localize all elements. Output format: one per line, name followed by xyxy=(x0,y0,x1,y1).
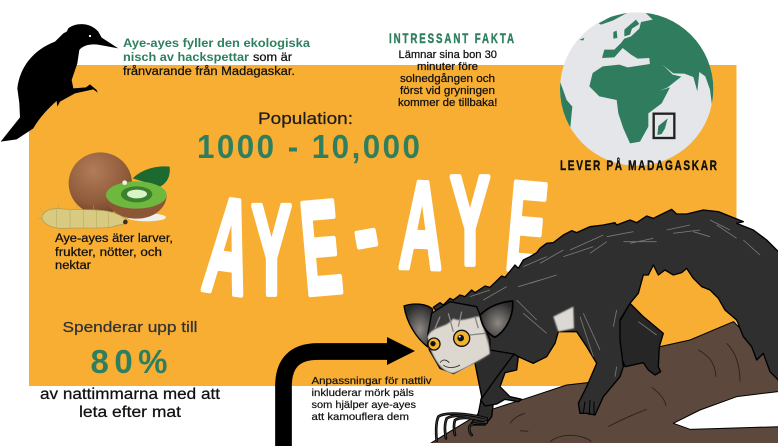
fur highlights xyxy=(470,220,760,377)
arrow pointing to the aye-aye xyxy=(284,337,415,446)
text: night hours xyxy=(40,386,221,421)
text: interesting fact body: Lämnar sina bon 30 xyxy=(398,49,497,61)
heading: interesting fact: INTRESSANT FAKTA xyxy=(389,32,514,46)
text: woodpecker niche: Aye-ayes fyller den ekologiska xyxy=(123,38,311,50)
text: diet: frukter, nötter, och xyxy=(55,247,162,259)
number: 80%: 80% xyxy=(90,343,168,380)
icon: woodpecker silhouette xyxy=(1,24,118,142)
label: lives on Madagascar: LEVER PÅ MADAGASKAR xyxy=(560,156,717,173)
text: interesting fact body: solnedgången och xyxy=(400,73,495,85)
orange background panel xyxy=(29,65,736,386)
ear far xyxy=(404,304,433,347)
hind leg far side xyxy=(617,303,663,375)
text: woodpecker niche: nisch av hackspettar xyxy=(123,52,250,64)
hind foot toes xyxy=(583,400,594,415)
lower hand fingers xyxy=(436,414,487,441)
title: AYE-AYE: E xyxy=(501,154,552,299)
text: night hours: leta efter mat xyxy=(79,404,182,421)
title: AYE-AYE xyxy=(197,150,552,323)
text: woodpecker niche: frånvarande från Madagaskar. xyxy=(123,66,295,78)
text: night hours: av nattimmarna med att xyxy=(40,386,221,403)
title: AYE-AYE: E xyxy=(295,173,347,323)
text: adaptations xyxy=(312,375,432,423)
globe with Madagascar marker xyxy=(557,8,719,166)
text: interesting fact body: kommer de tillbaka! xyxy=(398,97,498,109)
title: AYE-AYE: - xyxy=(342,164,388,295)
text: woodpecker niche xyxy=(123,38,311,78)
upper hand xyxy=(481,354,522,406)
text: interesting fact body xyxy=(398,49,498,109)
chest patch xyxy=(553,307,574,332)
text: diet xyxy=(55,233,173,272)
text: diet: nektar xyxy=(55,260,91,272)
tree branch xyxy=(430,322,778,445)
ear near xyxy=(480,301,513,337)
title: AYE-AYE: A xyxy=(197,169,260,323)
text: adaptations: som hjälper aye-ayes xyxy=(312,399,416,411)
text: adaptations: att kamouflera dem xyxy=(312,411,409,423)
front arm xyxy=(470,350,514,425)
title: AYE-AYE: A xyxy=(397,155,446,295)
heading: population: Population: xyxy=(258,109,353,128)
text: interesting fact body: först vid gryningen xyxy=(400,85,495,97)
body and tail xyxy=(433,209,778,415)
nose and mouth xyxy=(440,360,460,367)
text: interesting fact body: minuter före xyxy=(417,61,478,73)
illustration: aye-aye on branch xyxy=(404,209,778,445)
title: AYE-AYE: Y xyxy=(251,180,292,322)
title: AYE-AYE: Y xyxy=(450,150,490,291)
icon: kiwi and larva xyxy=(37,152,170,229)
text: adaptations: Anpassningar för nattliv xyxy=(312,375,432,387)
face xyxy=(427,316,490,373)
number: population range: 1000 - 10,000 xyxy=(197,128,420,165)
text: spends up to: Spenderar upp till xyxy=(62,319,198,336)
eyes xyxy=(428,330,470,350)
text: adaptations: inkluderar mörk päls xyxy=(312,387,414,399)
text: diet: Aye-ayes äter larver, xyxy=(55,233,173,245)
text: woodpecker niche: som är xyxy=(253,52,292,64)
head xyxy=(427,302,490,374)
